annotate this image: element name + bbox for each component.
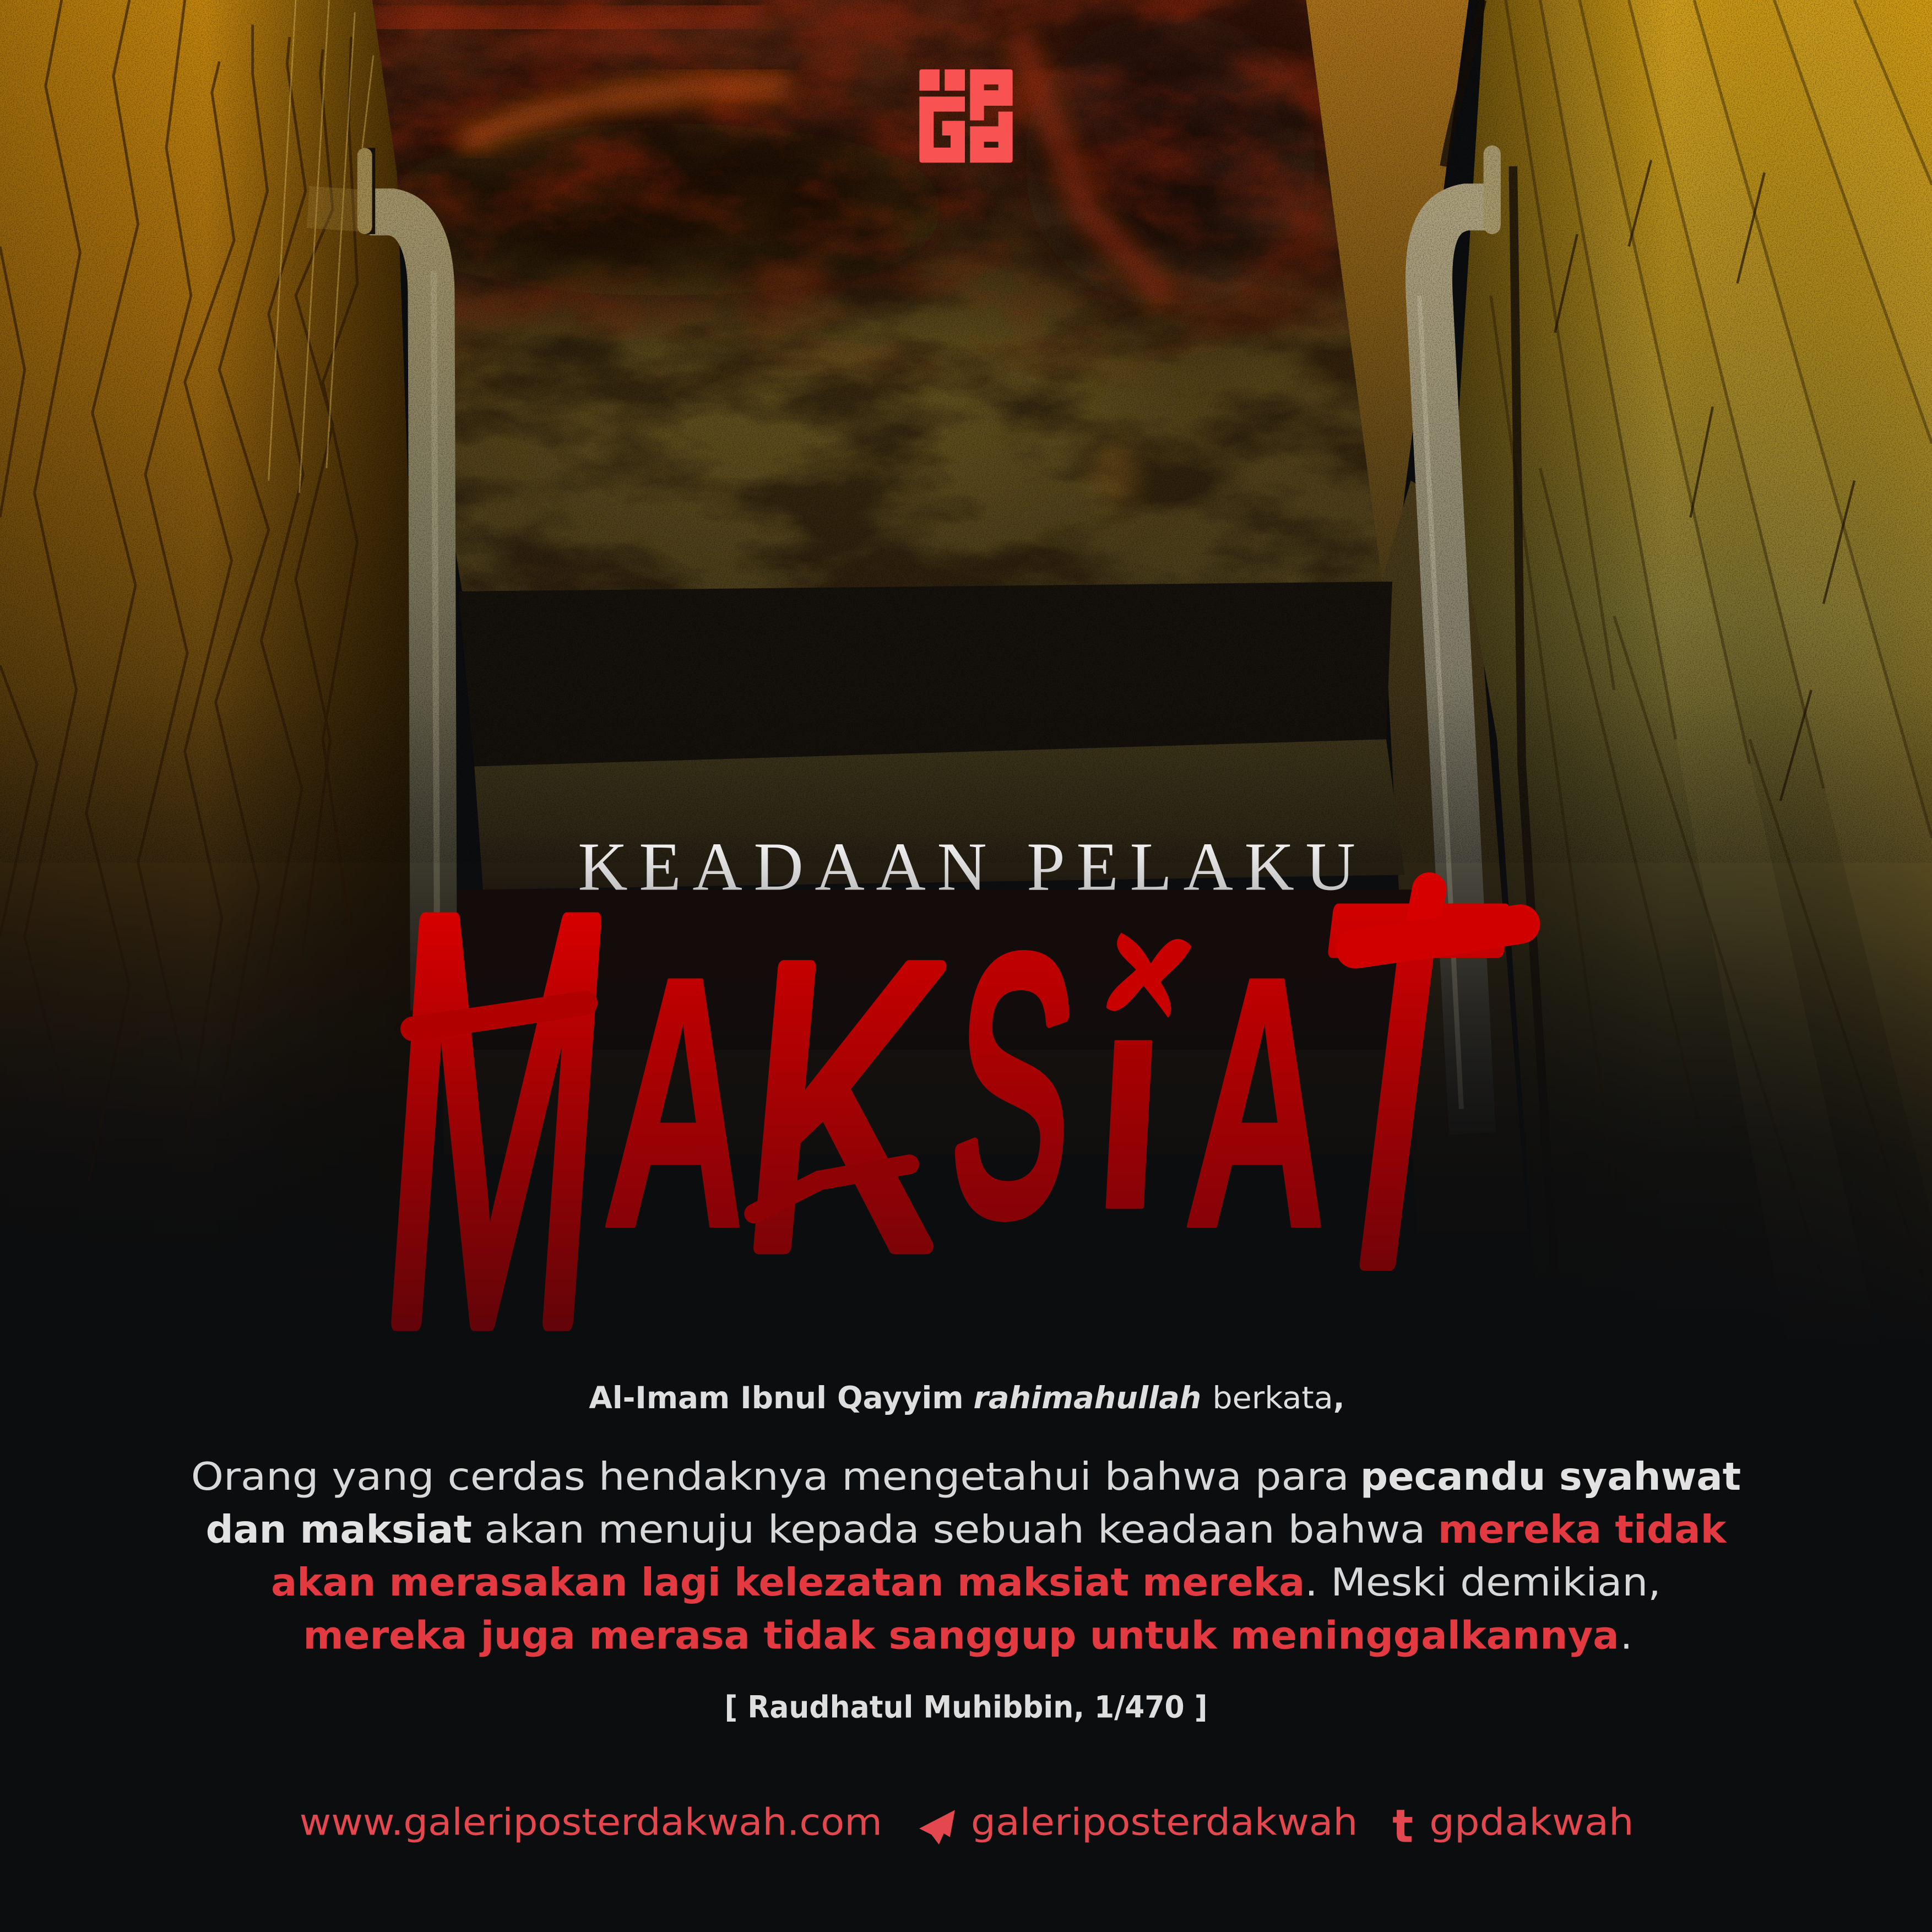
heading: Maksiat: A	[598, 903, 761, 1303]
lower risers	[443, 889, 1417, 1050]
quote body: Orang yang cerdas hendaknya mengetahui bahwa para	[191, 1455, 1349, 1499]
right handrail	[1419, 145, 1501, 1133]
footer links	[300, 1800, 1634, 1853]
heading: Keadaan Pelaku: KEADAAN PELAKU	[578, 828, 1355, 905]
footer links: galeriposterdakwah	[971, 1800, 1358, 1843]
heading: Maksiat: K	[727, 880, 964, 1334]
title brush accents	[413, 889, 1521, 1214]
quote body: . Meski demikian,	[1305, 1561, 1661, 1605]
cable	[1444, 0, 1555, 1282]
quote body: mereka juga merasa tidak sanggup untuk meninggalkannya	[303, 1614, 1619, 1658]
footer links: gpdakwah	[1429, 1800, 1634, 1843]
upper stair riser	[458, 582, 1392, 767]
bottom fade to black	[0, 690, 1932, 1355]
background photo: dark stairwell	[0, 0, 1932, 1219]
heading: Maksiat	[366, 796, 1525, 1443]
left handrail	[308, 148, 437, 1011]
quote body: akan merasakan lagi kelezatan maksiat mereka	[271, 1561, 1305, 1605]
quote body: mereka tidak	[1438, 1508, 1727, 1552]
i-dot cross ornament	[1106, 933, 1191, 1018]
icon: tumblr: t	[1392, 1800, 1413, 1853]
quote body: pecandu syahwat	[1360, 1455, 1741, 1499]
intro line: rahimahullah	[973, 1380, 1201, 1415]
quote body: akan menuju kepada sebuah keadaan bahwa	[484, 1508, 1425, 1552]
heading: Maksiat: T	[1274, 800, 1525, 1371]
stair side wall	[1382, 481, 1528, 1232]
heading: Maksiat: S	[941, 882, 1086, 1288]
left tiled wall	[0, 0, 413, 1282]
logo GPD	[919, 69, 1013, 162]
quote body	[191, 1455, 1741, 1658]
right landing edge	[1306, 0, 1469, 585]
citation: [ Raudhatul Muhibbin, 1/470 ]	[725, 1690, 1208, 1725]
intro line: ,	[1333, 1380, 1345, 1415]
stair tread	[474, 739, 1404, 889]
intro line: Al-Imam Ibnul Qayyim	[589, 1380, 964, 1415]
heading: Maksiat: I	[1088, 989, 1170, 1258]
heading: Maksiat: A	[1179, 903, 1342, 1303]
intro line	[589, 1380, 1345, 1415]
right ribbed wall	[1444, 0, 1932, 1454]
intro line: berkata	[1212, 1380, 1333, 1415]
quote body: .	[1620, 1614, 1632, 1658]
floor landing with rust stains	[363, 0, 1398, 591]
quote body: dan maksiat	[206, 1508, 472, 1552]
grain	[0, 0, 1932, 862]
heading: Maksiat: M	[366, 796, 627, 1443]
icon: telegram	[919, 1810, 955, 1844]
footer links: www.galeriposterdakwah.com	[300, 1800, 882, 1843]
